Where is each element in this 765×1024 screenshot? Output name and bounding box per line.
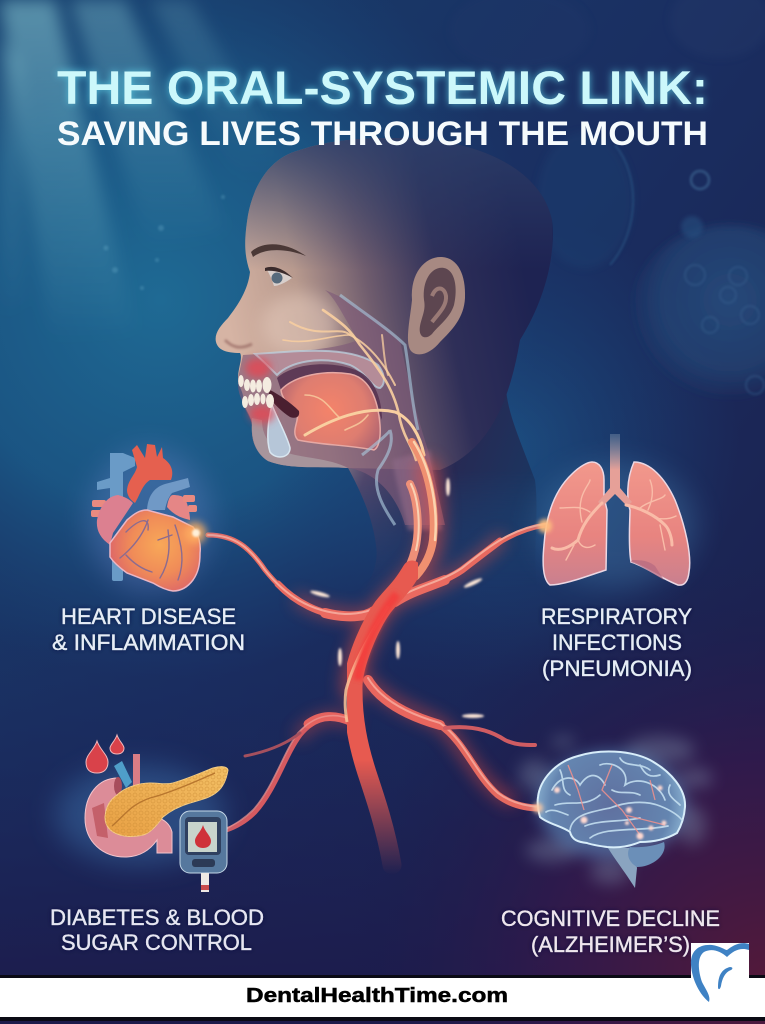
- label: diabetes: [50, 905, 264, 955]
- windpipe: [392, 450, 442, 530]
- cavity shadow: [277, 364, 382, 420]
- upper brain branch: [445, 727, 535, 745]
- title line 2: SAVING LIVES THROUGH THE MOUTH: [57, 115, 708, 153]
- translucent airway overlay: [238, 290, 445, 525]
- icon: tooth logo: [691, 943, 749, 1002]
- lung branch highlight: [395, 524, 546, 600]
- brain halo: [538, 751, 686, 859]
- faint background microbes: [450, 0, 765, 405]
- outer strand: [412, 442, 434, 576]
- glow center: [192, 529, 200, 537]
- inner strand highlight: [411, 484, 419, 550]
- glowing sparks: [310, 478, 484, 718]
- heart halo: [88, 448, 212, 592]
- heart ventricles: [110, 510, 200, 591]
- title: [57, 61, 708, 153]
- footer bar: [0, 975, 765, 1021]
- label: cognitive decline: [501, 906, 720, 957]
- brain branch highlight: [368, 678, 540, 807]
- palate outline: [255, 351, 384, 388]
- facial highlight: [262, 293, 338, 357]
- top-center microbe: [450, 0, 590, 70]
- icon: lungs: [536, 434, 696, 587]
- blue tube: [114, 761, 132, 788]
- chin skin: [252, 418, 348, 468]
- inflammation glow: [184, 522, 206, 544]
- footer website text: DentalHealthTime.com: [246, 985, 508, 1007]
- left lung: [543, 462, 607, 585]
- neural sparks: [568, 765, 665, 835]
- arterial branches: [208, 442, 546, 830]
- label: cognitive decline: (ALZHEIMER’S): [531, 932, 690, 957]
- central vascular network: [208, 442, 546, 865]
- top-right microbe: [670, 0, 765, 58]
- pulmonary artery: [147, 478, 190, 510]
- neural branches in mouth: [283, 310, 424, 460]
- upper gum inflammation: [245, 358, 271, 378]
- label: heart disease: [52, 604, 245, 655]
- lower gum inflammation: [249, 405, 275, 423]
- label: respiratory infections: (PNEUMONIA): [542, 656, 692, 681]
- head silhouette: [216, 138, 553, 470]
- laryngeal structures: [362, 430, 395, 525]
- duodenum inner folds: [92, 803, 108, 838]
- vessel contact glow: [533, 803, 543, 813]
- vessel contact glow: [538, 519, 552, 533]
- aorta: [127, 444, 172, 503]
- small side branch: [245, 733, 300, 756]
- trunk highlight: [345, 606, 388, 722]
- title line 1: THE ORAL-SYSTEMIC LINK:: [57, 61, 708, 114]
- branch to meter: [226, 718, 352, 830]
- light rays: [0, 0, 290, 340]
- lower lobe shadow: [631, 560, 664, 580]
- cerebrum: [538, 751, 685, 847]
- ring microbe: [691, 171, 709, 189]
- sphere outline: [610, 145, 633, 265]
- main trunk: [353, 570, 412, 865]
- lungs halo: [536, 463, 696, 587]
- brain stem: [608, 848, 637, 888]
- meter branch thick section: [308, 717, 352, 724]
- right lung: [628, 462, 690, 585]
- soft microbe: [681, 216, 703, 238]
- lung branch middle: [395, 541, 500, 602]
- trunk inner red: [358, 594, 397, 680]
- heart branch highlight: [208, 535, 388, 614]
- icon: pancreas and glucose meter: [55, 735, 228, 892]
- label: diabetes: SUGAR CONTROL: [61, 930, 252, 955]
- oral gap: [268, 390, 299, 418]
- lower jaw bone: [268, 405, 290, 457]
- tongue: [281, 373, 380, 450]
- right pulmonary veins: [183, 495, 197, 512]
- trachea: [598, 434, 632, 506]
- microbe surface cells: [685, 265, 764, 394]
- blood drops: [86, 735, 124, 773]
- glowing nodes: [554, 786, 666, 840]
- left atrium: [167, 495, 190, 520]
- heart branch middle: [278, 584, 388, 616]
- meter branch highlight: [226, 716, 352, 829]
- duodenum opening: [114, 777, 122, 795]
- lung branch thick section: [395, 580, 445, 602]
- skull-base line: [340, 295, 418, 430]
- label: heart disease: HEART DISEASE: [61, 604, 236, 629]
- pancreas lobules: [105, 767, 228, 836]
- pink tube: [133, 754, 140, 794]
- inner strand: [403, 484, 418, 578]
- upper vena cava: [97, 453, 135, 505]
- duodenum: [85, 778, 172, 857]
- label: respiratory infections: INFECTIONS: [552, 630, 682, 655]
- branch to brain: [368, 680, 540, 808]
- icon: brain with clouds: [519, 736, 713, 888]
- label: cognitive decline: COGNITIVE DECLINE: [501, 906, 720, 931]
- label: diabetes: DIABETES & BLOOD: [50, 905, 264, 930]
- label: heart disease: & INFLAMMATION: [52, 630, 245, 655]
- right atrium: [97, 495, 133, 545]
- pancreatic duct: [112, 773, 215, 826]
- floating particles: [104, 195, 225, 290]
- branch to heart: [208, 535, 388, 616]
- nose shading: [225, 340, 252, 347]
- outer strand highlight: [414, 442, 436, 540]
- heart branch thick section: [325, 600, 388, 616]
- teeth: [238, 375, 274, 408]
- branch to lungs: [395, 525, 546, 602]
- ear: [408, 257, 465, 354]
- clouds: [519, 736, 713, 884]
- head and neck illustration: [216, 138, 553, 560]
- lower vena cava: [112, 550, 123, 581]
- label: respiratory infections: RESPIRATORY: [541, 604, 692, 629]
- icon: heart: [88, 444, 212, 592]
- pancreas: [105, 767, 228, 836]
- bronchial trees: [552, 480, 676, 560]
- cerebellum: [628, 842, 665, 867]
- head top shading: [245, 138, 552, 272]
- sphere body: [537, 132, 633, 268]
- brain branch thick section: [368, 680, 440, 725]
- gyri lines: [546, 758, 682, 838]
- neck: [348, 394, 536, 560]
- vessel glow: [300, 470, 510, 800]
- glucose meter: [180, 811, 227, 892]
- eyebrow: [251, 244, 306, 257]
- label: respiratory infections: [541, 604, 692, 681]
- large microbe: [630, 225, 765, 405]
- left pulmonary veins: [91, 500, 106, 517]
- pancreas halo: [55, 765, 225, 865]
- coronary vessels: [120, 520, 182, 580]
- eye: [265, 267, 293, 286]
